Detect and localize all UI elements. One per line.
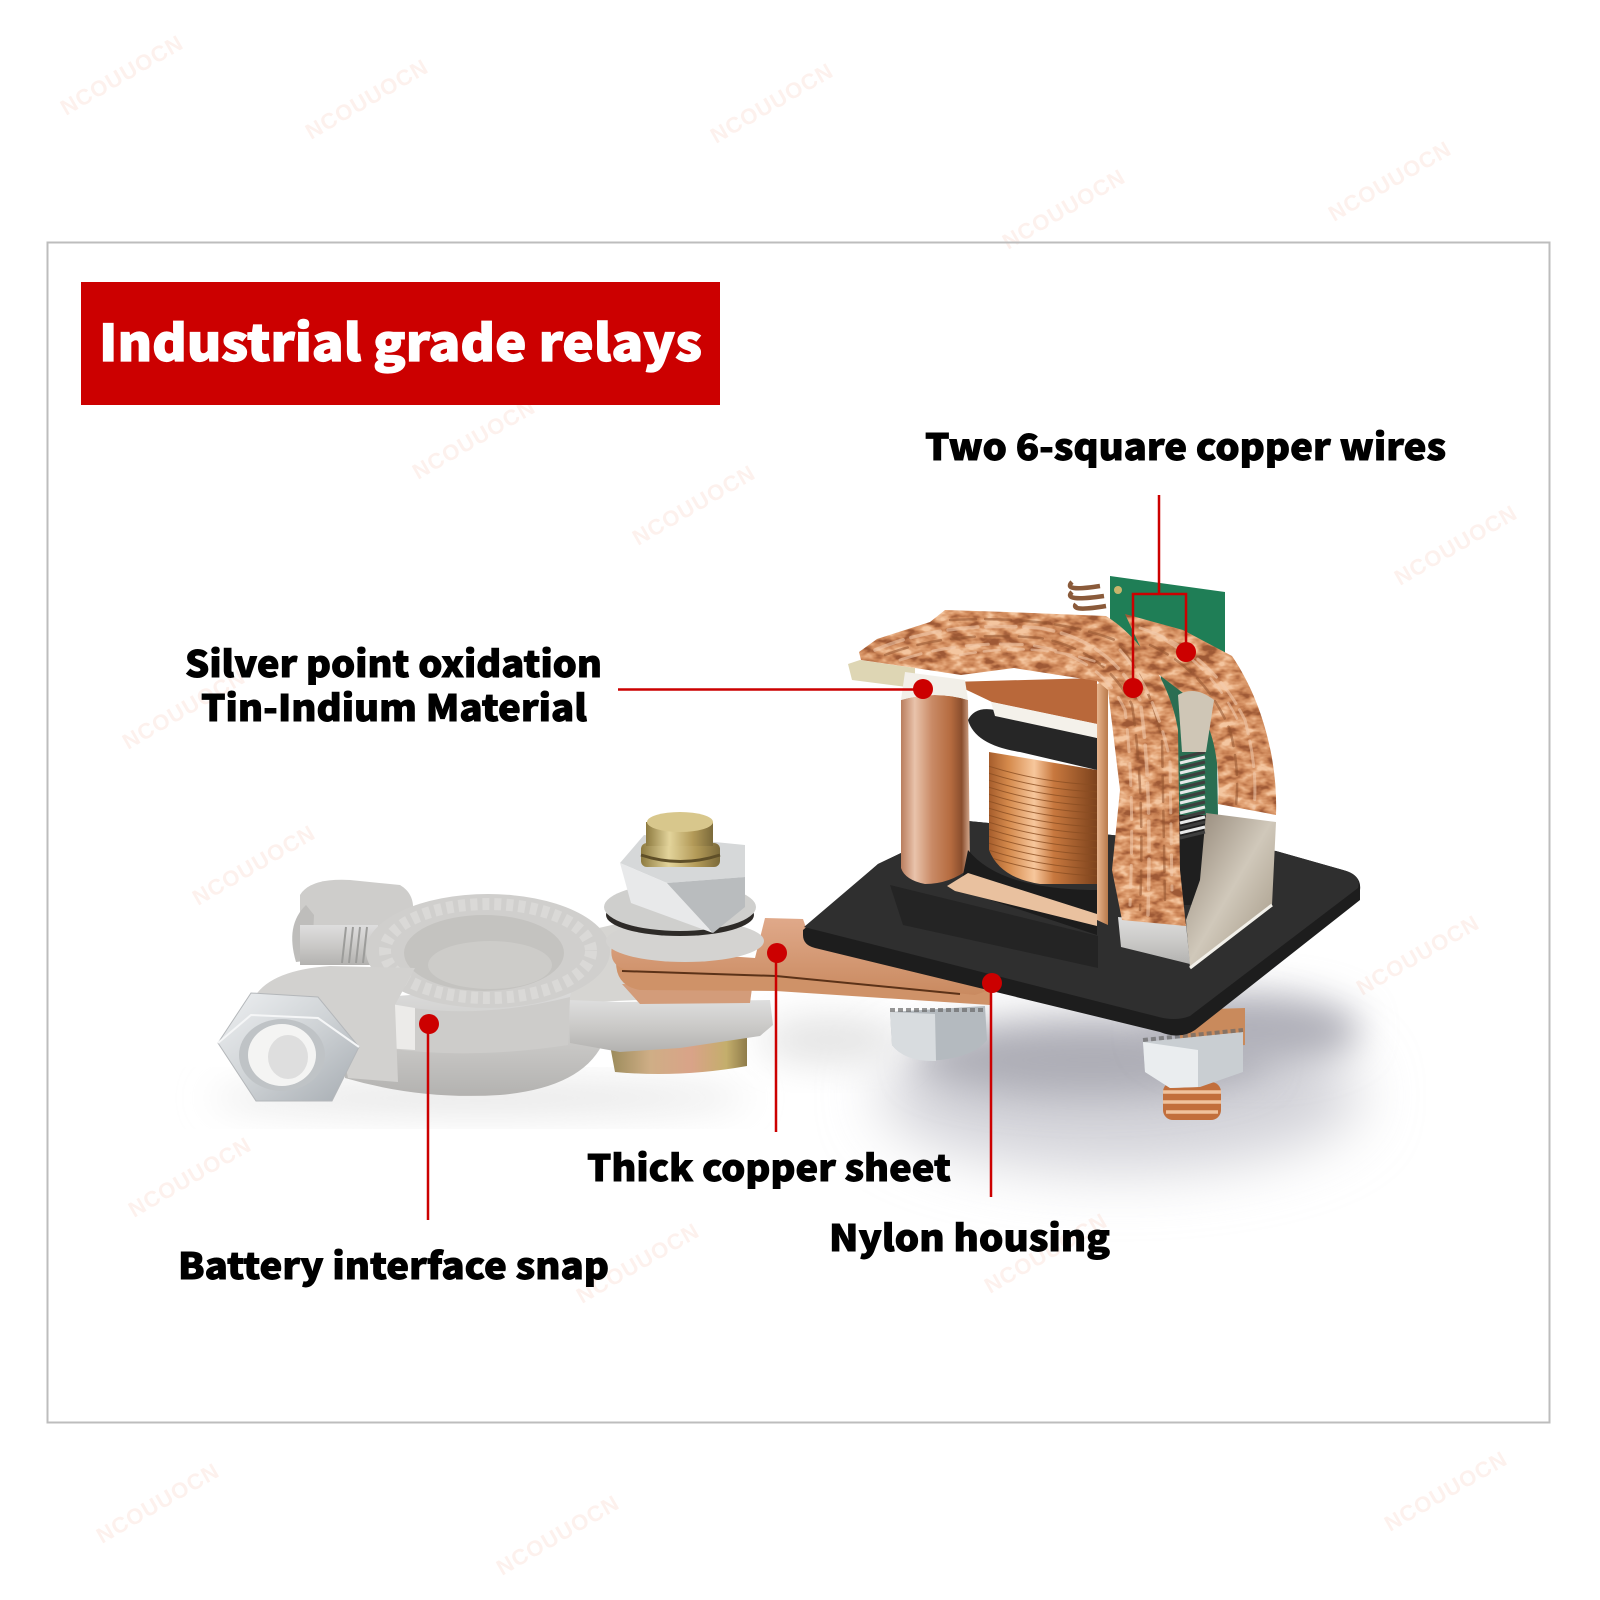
copper reflection on tab <box>622 984 752 1004</box>
title: Industrial grade relays <box>99 304 702 376</box>
relay <box>803 576 1360 1036</box>
raised base block <box>890 885 1098 968</box>
lower nut left <box>890 1006 987 1061</box>
callout: silver point oxidation <box>185 636 933 732</box>
terminal tab top <box>568 922 640 1003</box>
watermarks: NCOUUOCN <box>1380 1446 1512 1536</box>
back braid strands <box>1140 628 1255 808</box>
callout: silver point oxidation: Silver point oxidation <box>185 636 602 688</box>
copper pillar <box>901 695 970 884</box>
silver contact plate <box>848 660 915 688</box>
watermarks: NCOUUOCN <box>118 664 250 754</box>
watermarks: NCOUUOCN <box>188 820 320 910</box>
winding coil <box>985 752 1100 884</box>
callout: nylon housing: Nylon housing <box>829 1210 1110 1262</box>
threaded stud <box>641 812 720 867</box>
callout: battery interface snap: Battery interface snap <box>178 1238 609 1290</box>
copper base plate <box>947 873 1097 926</box>
watermarks: NCOUUOCN <box>706 58 838 148</box>
panel frame <box>48 242 1550 1422</box>
watermarks: NCOUUOCN <box>124 1132 256 1222</box>
black base plate <box>803 821 1360 1036</box>
watermarks: NCOUUOCN <box>1390 500 1522 590</box>
silver bracket <box>1186 813 1276 968</box>
terminal post hole <box>404 915 564 991</box>
watermarks: NCOUUOCN <box>998 164 1130 254</box>
front braid strands <box>875 619 1172 915</box>
back lug <box>300 880 413 936</box>
post stack <box>604 812 764 962</box>
terminal right tab <box>568 1000 773 1052</box>
dark area behind spring base <box>1172 815 1220 905</box>
lower nut right with stud <box>1143 1008 1245 1120</box>
watermarks: NCOUUOCN <box>56 30 188 120</box>
terminal underside nut <box>609 1030 747 1074</box>
callout: nylon housing <box>829 973 1110 1262</box>
clamp bolt shaft <box>300 925 378 965</box>
watermarks: NCOUUOCN <box>628 460 760 550</box>
hex nut <box>620 835 745 933</box>
callout: thick copper sheet <box>587 943 951 1192</box>
callout: battery interface snap <box>178 1014 609 1290</box>
white armature <box>991 702 1097 738</box>
title banner <box>81 282 720 405</box>
top ring <box>366 894 610 1008</box>
vertical spring <box>1178 691 1214 838</box>
callout: thick copper sheet: Thick copper sheet <box>587 1140 951 1192</box>
vertical copper frame <box>1097 680 1108 925</box>
watermarks: NCOUUOCN <box>1324 136 1456 226</box>
back braid <box>1125 614 1276 815</box>
product shadows <box>210 994 1360 1170</box>
watermarks: NCOUUOCN <box>492 1490 624 1580</box>
bobbin top <box>968 709 1097 770</box>
watermarks: NCOUUOCN <box>301 54 433 144</box>
terminal body <box>345 980 602 1096</box>
watermarks: NCOUUOCN <box>572 1218 704 1308</box>
battery terminal clamp <box>218 880 773 1101</box>
big washer <box>606 920 764 962</box>
copper sheet <box>611 918 990 1005</box>
hex nut <box>218 993 359 1101</box>
green circuit board <box>1110 576 1225 660</box>
callout: silver point oxidation: Tin-Indium Material <box>201 680 587 732</box>
inner copper under armature <box>950 678 1097 724</box>
upper washer <box>604 883 756 931</box>
callout: two 6-square copper wires <box>925 419 1446 698</box>
watermarks: NCOUUOCN <box>1352 910 1484 1000</box>
silver foot <box>1118 917 1190 964</box>
front band <box>385 997 570 1053</box>
watermarks: NCOUUOCN <box>92 1458 224 1548</box>
white contact on pillar <box>901 672 968 700</box>
small top spring <box>1070 582 1106 609</box>
callout: two 6-square copper wires: Two 6-square copper wires <box>925 419 1446 471</box>
front lug <box>255 966 415 1082</box>
board behind spring <box>1160 668 1218 815</box>
watermarks: NCOUUOCN <box>980 1208 1112 1298</box>
bobbin lower <box>960 850 1097 935</box>
watermarks: NCOUUOCN <box>408 394 540 484</box>
front braid <box>859 610 1186 926</box>
